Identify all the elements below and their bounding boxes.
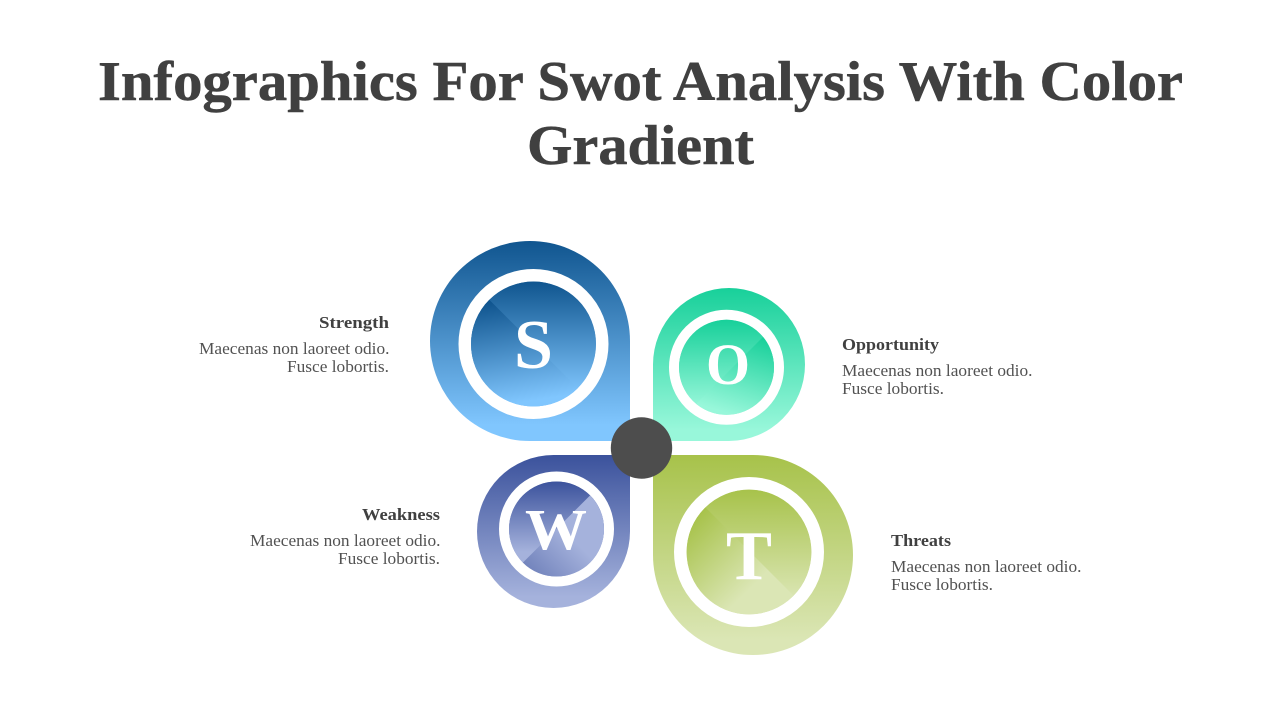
text block: strength xyxy=(199,313,390,376)
text block: opportunity xyxy=(842,335,1032,398)
panel: strength petal xyxy=(430,241,630,441)
letter W: W xyxy=(525,497,587,562)
panel: weakness petal xyxy=(477,455,630,608)
title xyxy=(98,51,1183,177)
title: Infographics For Swot Analysis With Color xyxy=(98,51,1183,113)
panel: threats petal xyxy=(653,455,853,655)
letter S: S xyxy=(514,307,553,384)
center dot xyxy=(611,417,672,479)
text block: threats: Maecenas non laoreet odio. xyxy=(891,557,1082,576)
text block: threats: Threats xyxy=(891,531,951,550)
text block: threats xyxy=(891,531,1082,594)
text block: opportunity: Maecenas non laoreet odio. xyxy=(842,361,1032,380)
text block: opportunity: Fusce lobortis. xyxy=(842,379,944,398)
text block: weakness: Fusce lobortis. xyxy=(338,549,440,568)
text block: strength: Strength xyxy=(319,313,390,332)
text block: threats: Fusce lobortis. xyxy=(891,575,993,594)
text block: weakness xyxy=(250,505,440,568)
title: Gradient xyxy=(527,115,754,177)
text block: weakness: Maecenas non laoreet odio. xyxy=(250,531,440,550)
letter O: O xyxy=(706,332,750,397)
panel: opportunity petal xyxy=(653,288,805,441)
text block: strength: Maecenas non laoreet odio. xyxy=(199,339,390,358)
text block: opportunity: Opportunity xyxy=(842,335,940,354)
text block: strength: Fusce lobortis. xyxy=(287,357,389,376)
letter T: T xyxy=(726,518,772,595)
text block: weakness: Weakness xyxy=(362,505,440,524)
